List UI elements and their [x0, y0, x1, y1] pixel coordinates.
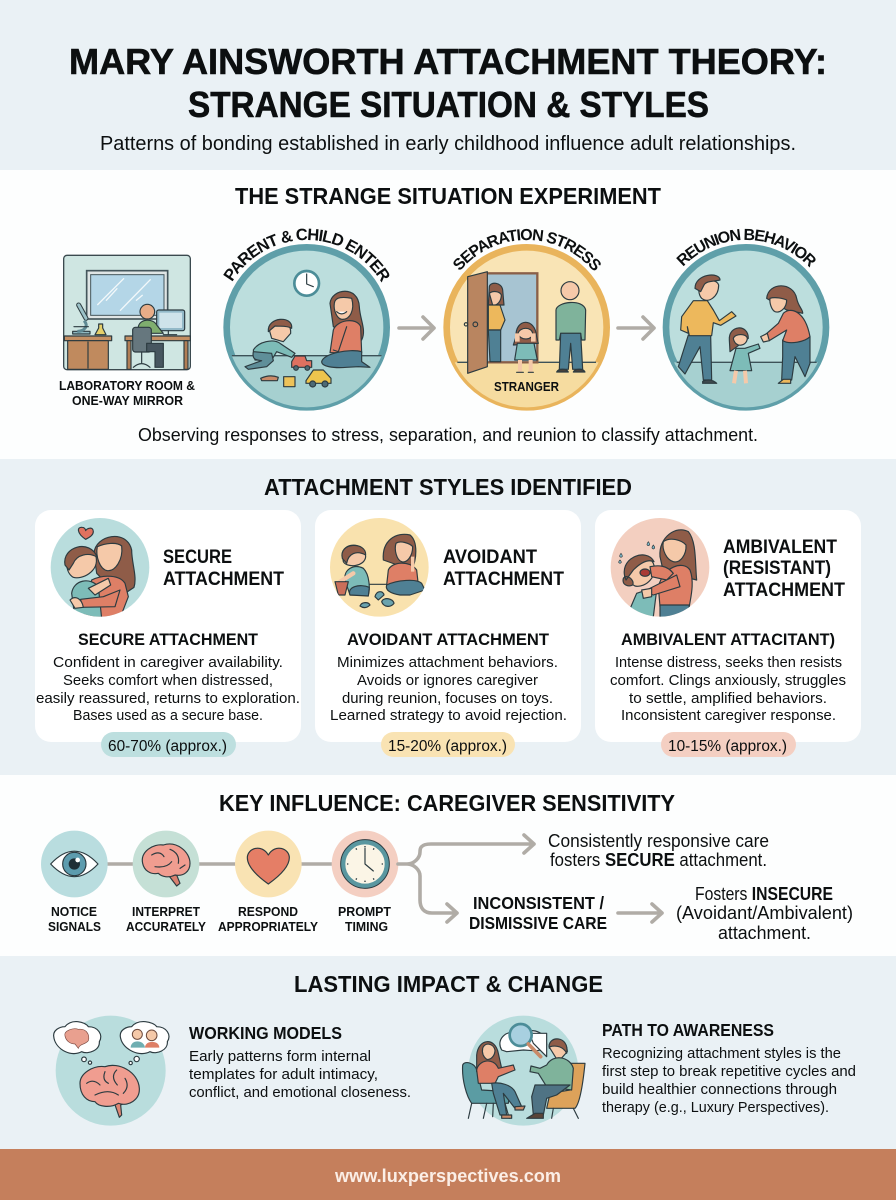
text: working models: Early patterns form internal	[189, 1048, 371, 1065]
heading: THE STRANGE SITUATION EXPERIMENT	[235, 183, 661, 209]
percentage badge: 10-15% (approx.)	[668, 738, 787, 755]
step 3: reunion behavior	[662, 228, 830, 411]
description: Confident in caregiver availability.	[53, 654, 283, 671]
heading: LASTING IMPACT & CHANGE	[294, 971, 603, 997]
percentage badge	[661, 732, 796, 757]
card heading: AVOIDANT	[443, 547, 537, 568]
text: working models: WORKING MODELS	[189, 1023, 342, 1043]
card heading: (RESISTANT)	[723, 558, 831, 579]
description: to settle, amplified behaviors.	[629, 690, 827, 707]
label: laboratory room: ONE-WAY MIRROR	[72, 393, 184, 408]
card heading: SECURE	[163, 547, 232, 568]
label: laboratory room	[59, 378, 195, 408]
subtitle: AVOIDANT ATTACHMENT	[347, 630, 550, 649]
icon: heart	[235, 831, 302, 897]
card heading: ATTACHMENT	[443, 569, 564, 590]
icon: child and caregiver apart	[330, 518, 429, 617]
text: working models: conflict, and emotional closeness.	[189, 1084, 411, 1101]
outcome: insecure: (Avoidant/Ambivalent)	[676, 903, 853, 923]
outcome: insecure: attachment.	[718, 923, 811, 943]
percentage badge: 60-70% (approx.)	[108, 738, 227, 755]
label: stranger: STRANGER	[494, 379, 560, 394]
subtitle: SECURE ATTACHMENT	[78, 630, 259, 649]
text: path to awareness: PATH TO AWARENESS	[602, 1020, 774, 1040]
outcome: responsive care: fosters SECURE attachment.	[550, 850, 767, 870]
step: respond appropriately	[218, 831, 318, 934]
label: ACCURATELY	[126, 919, 206, 934]
card: ambivalent	[595, 510, 861, 757]
step: prompt timing	[332, 831, 398, 934]
illustration: laboratory room	[64, 255, 190, 370]
curved label: SEPARATION STRESS	[453, 228, 601, 270]
heading: KEY INFLUENCE: CAREGIVER SENSITIVITY	[219, 790, 675, 816]
step: notice signals	[41, 831, 108, 934]
arrow	[399, 317, 434, 339]
description: during reunion, focuses on toys.	[342, 690, 553, 707]
description: Intense distress, seeks then resists	[615, 654, 842, 671]
step 1: parent and child enter	[223, 228, 390, 411]
outcome: responsive care: Consistently responsive care	[548, 831, 769, 851]
text: path to awareness: build healthier connections through	[602, 1081, 837, 1098]
panel: lasting impact and change	[54, 971, 856, 1126]
panel: key influence caregiver sensitivity	[0, 775, 896, 956]
label: inconsistent care	[469, 893, 607, 933]
card: avoidant	[315, 510, 581, 757]
label: NOTICE	[51, 904, 97, 919]
panel: header	[69, 41, 827, 155]
label: laboratory room: LABORATORY ROOM &	[59, 378, 195, 393]
curved label: PARENT & CHILD ENTER	[223, 228, 390, 282]
arrow	[618, 317, 654, 339]
heading: ATTACHMENT STYLES IDENTIFIED	[264, 474, 632, 500]
label: SIGNALS	[48, 919, 101, 934]
label: TIMING	[345, 919, 388, 934]
description: Inconsistent caregiver response.	[621, 707, 836, 724]
card: secure	[35, 510, 301, 757]
illustration: therapy session	[463, 1016, 585, 1126]
description	[610, 654, 846, 724]
step: interpret accurately	[126, 831, 206, 934]
illustration: brain with thought bubbles	[54, 1016, 169, 1126]
label	[338, 904, 391, 934]
description: Seeks comfort when distressed,	[63, 672, 273, 689]
description: Avoids or ignores caregiver	[357, 672, 538, 689]
percentage badge	[381, 732, 515, 757]
title: MARY AINSWORTH ATTACHMENT THEORY:	[69, 41, 827, 82]
text: working models	[189, 1023, 411, 1101]
icon: mother hugging child	[51, 518, 149, 618]
text: path to awareness	[602, 1020, 856, 1116]
text: path to awareness: first step to break repetitive cycles and	[602, 1063, 856, 1080]
subtitle: AMBIVALENT ATTACITANT)	[621, 630, 835, 649]
curved label: REUNION BEHAVIOR	[676, 228, 816, 268]
outcome: responsive care	[548, 831, 769, 870]
panel: attachment styles identified	[35, 474, 861, 757]
description: comfort. Clings anxiously, struggles	[610, 672, 846, 689]
title	[69, 41, 827, 125]
connector line	[74, 862, 398, 866]
description: Minimizes attachment behaviors.	[337, 654, 558, 671]
icon: eye	[41, 831, 108, 897]
footer	[0, 1149, 896, 1200]
percentage badge	[101, 732, 236, 757]
label	[218, 904, 318, 934]
description: Learned strategy to avoid rejection.	[330, 707, 567, 724]
label: inconsistent care: INCONSISTENT /	[473, 893, 604, 913]
card heading: AMBIVALENT	[723, 537, 837, 558]
card heading: ATTACHMENT	[723, 580, 845, 601]
arrow	[618, 904, 662, 922]
label: PROMPT	[338, 904, 391, 919]
card heading	[443, 547, 564, 590]
branching arrow	[398, 835, 534, 922]
caption: Observing responses to stress, separation, and reunion to classify attachment.	[138, 425, 758, 445]
label: RESPOND	[238, 904, 298, 919]
description	[36, 654, 300, 724]
text: path to awareness: therapy (e.g., Luxury Perspectives).	[602, 1099, 829, 1116]
title: STRANGE SITUATION & STYLES	[188, 84, 709, 125]
text: path to awareness: Recognizing attachment styles is the	[602, 1045, 841, 1062]
panel: the strange situation experiment	[0, 170, 896, 459]
subtitle: Patterns of bonding established in early childhood influence adult relationships.	[100, 133, 796, 155]
percentage badge: 15-20% (approx.)	[388, 738, 507, 755]
card heading	[723, 537, 845, 601]
icon: brain	[133, 831, 199, 897]
description: Bases used as a secure base.	[73, 707, 263, 724]
icon: clock	[332, 831, 398, 897]
text: working models: templates for adult intimacy,	[189, 1066, 378, 1083]
card heading: ATTACHMENT	[163, 569, 284, 590]
outcome: insecure	[676, 884, 853, 943]
card heading	[163, 547, 284, 590]
label	[48, 904, 101, 934]
label: inconsistent care: DISMISSIVE CARE	[469, 913, 607, 933]
outcome: insecure: Fosters INSECURE	[695, 884, 833, 904]
label: APPROPRIATELY	[218, 919, 318, 934]
footer: www.luxperspectives.com	[334, 1166, 561, 1186]
description	[330, 654, 567, 724]
label: INTERPRET	[132, 904, 200, 919]
label	[126, 904, 206, 934]
icon: distressed child clinging	[611, 518, 709, 620]
step 2: separation stress	[443, 228, 610, 411]
description: easily reassured, returns to exploration.	[36, 690, 300, 707]
